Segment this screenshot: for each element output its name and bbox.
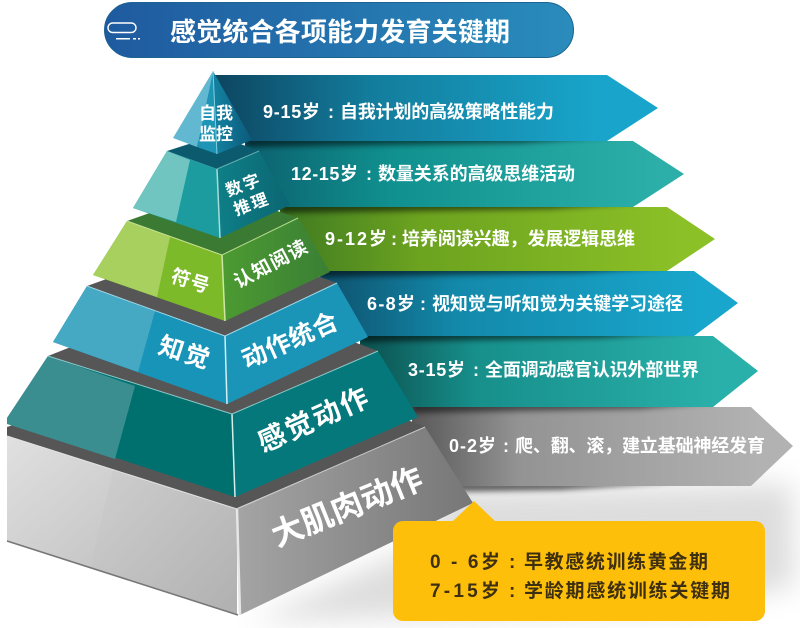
callout: golden periods: 0 - 6岁 (430, 551, 500, 573)
arrow 2: 12-15 numeric reasoning: : (366, 164, 372, 184)
arrow 6: 0-2 gross motor: 0-2岁 (449, 436, 496, 456)
arrow 3: 9-12 cognitive reading (280, 202, 715, 271)
arrow 2: 12-15 numeric reasoning (245, 136, 684, 207)
arrow 6: 0-2 gross motor (412, 402, 793, 492)
tier: symbols and cognitive reading (93, 190, 330, 321)
tier: perception and motor integration: 知觉 (155, 332, 213, 374)
callout: golden periods: 早教感统训练黄金期 (524, 550, 708, 573)
tier: numeric reasoning: 数字 (223, 170, 263, 200)
tier: symbols and cognitive reading: 认知阅读 (230, 236, 311, 293)
callout: golden periods: : (509, 552, 515, 573)
arrow 3: 9-12 cognitive reading: : (391, 229, 397, 249)
arrow 1: 9-15 self monitoring: : (328, 102, 334, 122)
pyramid (7, 71, 473, 615)
callout: golden periods: 7-15岁 (430, 580, 500, 602)
tier: self monitoring apex: 自我 (199, 103, 233, 123)
arrow 2: 12-15 numeric reasoning: 12-15岁 (291, 164, 358, 184)
tier: self monitoring apex (173, 71, 252, 154)
tier: numeric reasoning: 推理 (231, 189, 271, 219)
arrow 6: 0-2 gross motor: : (503, 436, 509, 456)
arrow 5: 3-15 sensory motor: : (473, 360, 479, 380)
arrow 5: 3-15 sensory motor: 全面调动感官认识外部世界 (485, 359, 699, 380)
tier: perception and motor integration (53, 240, 368, 404)
tier: symbols and cognitive reading: 符号 (168, 265, 212, 298)
arrow 4: 6-8 perception: : (420, 294, 426, 314)
arrow 2: 12-15 numeric reasoning: 数量关系的高级思维活动 (378, 163, 575, 184)
tier: perception and motor integration: 动作统合 (238, 307, 342, 375)
callout: golden periods: : (509, 581, 515, 602)
tier: gross motor base (7, 350, 473, 615)
callout: golden periods (393, 501, 765, 621)
title banner (104, 2, 574, 58)
tier: sensory motor: 感觉动作 (253, 382, 373, 458)
arrow 4: 6-8 perception (320, 266, 738, 336)
tier: self monitoring apex: 监控 (199, 125, 233, 144)
arrow 1: 9-15 self monitoring (215, 75, 658, 141)
title banner: 感觉统合各项能力发育关键期 (170, 17, 510, 47)
arrow 5: 3-15 sensory motor: 3-15岁 (408, 360, 465, 380)
tier: sensory motor (7, 290, 418, 497)
arrow 5: 3-15 sensory motor (360, 331, 758, 407)
tier: gross motor base: 大肌肉动作 (266, 460, 428, 554)
arrow 3: 9-12 cognitive reading: 培养阅读兴趣，发展逻辑思维 (402, 228, 635, 249)
arrow 4: 6-8 perception: 视知觉与听知觉为关键学习途径 (432, 293, 683, 314)
icon: banner glyph (108, 23, 140, 40)
arrow 3: 9-12 cognitive reading: 9-12岁 (325, 229, 387, 249)
callout: golden periods: 学龄期感统训练关键期 (524, 579, 730, 602)
arrow 1: 9-15 self monitoring: 自我计划的高级策略性能力 (340, 101, 554, 122)
ground shadow (250, 484, 795, 622)
arrow 4: 6-8 perception: 6-8岁 (367, 294, 415, 314)
arrow 1: 9-15 self monitoring: 9-15岁 (263, 102, 320, 122)
arrow 6: 0-2 gross motor: 爬、翻、滚，建立基础神经发育 (515, 435, 765, 456)
tier: numeric reasoning (133, 135, 290, 238)
